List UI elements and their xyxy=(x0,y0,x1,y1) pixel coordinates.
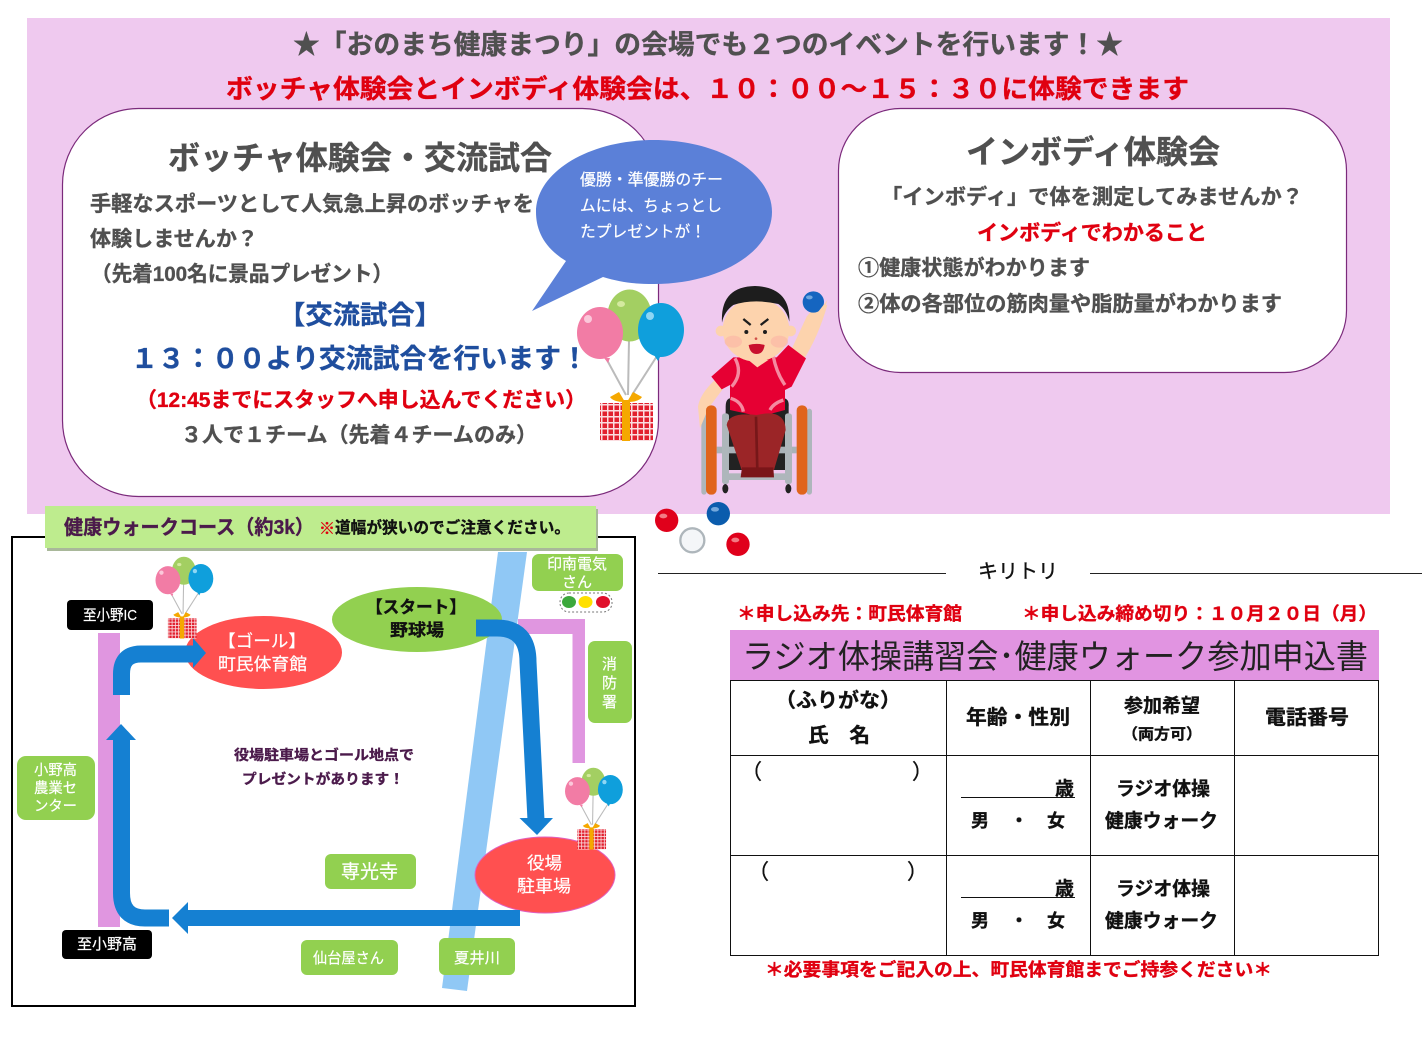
row 2: 男 xyxy=(971,911,989,931)
prize note: プレゼントがあります！ xyxy=(242,771,404,787)
match time: １３：００より交流試合を行います！ xyxy=(131,344,588,374)
label: Innami Electric xyxy=(532,554,623,591)
label: Ono High agriculture center: 小野高 xyxy=(34,762,77,779)
row 1: 健康ウォーク xyxy=(1105,810,1218,832)
application deadline: ＊申し込み締め切り：１０月２０日（月） xyxy=(1022,604,1377,624)
header: participation: 参加希望 xyxy=(1124,695,1200,717)
icon: balloons with gift xyxy=(577,290,684,441)
row 2: ・ xyxy=(1010,911,1028,931)
goal: town gymnasium: 町民体育館 xyxy=(218,655,307,674)
row 1: 歳 xyxy=(1055,778,1074,800)
icon: parking balloons xyxy=(565,768,623,850)
inbody benefits: ②体の各部位の筋肉量や脂肪量がわかります xyxy=(858,292,1282,316)
inbody subheading: インボディでわかること xyxy=(977,221,1207,245)
callout: prize speech bubble: ムには、ちょっとし xyxy=(580,198,722,215)
cut line: キリトリ xyxy=(978,561,1058,583)
row 1 xyxy=(741,761,1218,832)
town hall parking xyxy=(475,837,615,913)
label: Ono High agriculture center: 農業セ xyxy=(34,780,77,797)
heading: form title: ラジオ体操講習会･健康ウォーク参加申込書 xyxy=(742,638,1368,675)
callout: prize speech bubble: たプレゼントが！ xyxy=(580,223,706,241)
prize note xyxy=(234,747,414,787)
icon: goal balloons xyxy=(156,557,213,639)
header: participation xyxy=(1122,695,1202,743)
application destination: ＊申し込み先：町民体育館 xyxy=(737,604,962,624)
label: to Ono IC: 至小野IC xyxy=(83,607,137,624)
panel: pink event background xyxy=(27,18,1390,514)
boccia description xyxy=(90,193,534,286)
prize note: 役場駐車場とゴール地点で xyxy=(234,747,414,763)
label: fire station xyxy=(588,641,632,723)
row 1: 男 xyxy=(971,811,989,831)
town hall parking: 役場 xyxy=(527,854,562,873)
header: name: （ふりがな） xyxy=(775,688,901,712)
heading: walking course banner: 道幅が狭いのでご注意ください。 xyxy=(335,518,570,537)
arrow: west road north xyxy=(106,724,169,918)
row 2: （ xyxy=(748,861,769,884)
row 2: ラジオ体操 xyxy=(1116,878,1210,900)
row 1: ラジオ体操 xyxy=(1116,778,1210,800)
header: phone: 電話番号 xyxy=(1265,706,1349,729)
label: Sendaiya xyxy=(301,940,398,975)
town hall parking: 駐車場 xyxy=(517,877,571,896)
label: fire station: 署 xyxy=(602,694,617,711)
inbody invitation: 「インボディ」で体を測定してみませんか？ xyxy=(881,185,1303,209)
row 2: ） xyxy=(907,861,928,884)
callout: prize speech bubble xyxy=(532,140,772,311)
row 2: 健康ウォーク xyxy=(1105,910,1218,932)
label: fire station: 消 xyxy=(602,656,617,673)
row 1: ） xyxy=(912,761,933,784)
callout: prize speech bubble: 優勝・準優勝のチー xyxy=(580,171,723,189)
label: fire station: 防 xyxy=(602,675,617,692)
heading: experience times: ボッチャ体験会とインボディ体験会は、１０：００～１５：３０に体験できます xyxy=(226,74,1189,104)
row 1: ・ xyxy=(1010,811,1028,831)
arrow: parking to west corner xyxy=(172,902,520,934)
start: baseball field xyxy=(332,587,502,652)
inbody benefits: ①健康状態がわかります xyxy=(858,256,1090,280)
east road xyxy=(518,619,585,763)
label: Innami Electric: さん xyxy=(562,574,592,591)
west road xyxy=(98,633,120,927)
label: Innami Electric: 印南電気 xyxy=(547,556,607,573)
boccia title: ボッチャ体験会・交流試合 xyxy=(168,140,552,176)
label: to Ono IC xyxy=(67,600,153,630)
boccia description: （先着100名に景品プレゼント） xyxy=(91,262,393,286)
label: Sendaiya: 仙台屋さん xyxy=(313,950,384,967)
goal: town gymnasium: 【ゴール】 xyxy=(218,631,306,651)
heading: walking course banner: ※ xyxy=(319,521,335,538)
heading: walking course banner: 健康ウォークコース（約3k） xyxy=(64,516,314,539)
arrow: to goal xyxy=(122,638,206,695)
label: Senkoji temple: 専光寺 xyxy=(341,861,398,883)
label: Ono High agriculture center xyxy=(17,756,95,820)
match heading: 【交流試合】 xyxy=(278,300,442,330)
start: baseball field: 野球場 xyxy=(390,621,444,640)
label: Senkoji temple xyxy=(325,854,416,889)
heading: festival events: ★「おのまち健康まつり」の会場でも２つのイベントを行います！★ xyxy=(293,30,1123,60)
goal: town gymnasium xyxy=(185,616,342,689)
header: participation: （両方可） xyxy=(1122,725,1202,743)
label: Ono High agriculture center: ンター xyxy=(34,798,77,815)
table: application form xyxy=(730,680,1379,956)
match deadline: （12:45までにスタッフへ申し込んでください） xyxy=(136,389,586,412)
row 2 xyxy=(748,861,1218,932)
row 2: 歳 xyxy=(1055,878,1074,900)
header: age and gender: 年齢・性別 xyxy=(966,706,1070,729)
row 2: 女 xyxy=(1047,911,1065,931)
label: Natsui river: 夏井川 xyxy=(454,950,500,967)
inbody title: インボディ体験会 xyxy=(966,134,1220,170)
heading: walking course banner xyxy=(45,506,598,551)
team rule: ３人で１チーム（先着４チームのみ） xyxy=(181,424,537,447)
panel: boccia xyxy=(62,108,658,496)
boccia description: 体験しませんか？ xyxy=(90,228,258,251)
row 1: （ xyxy=(741,761,762,784)
inbody benefits xyxy=(858,256,1282,316)
traffic light xyxy=(560,593,612,612)
label: Natsui river xyxy=(439,938,515,975)
start: baseball field: 【スタート】 xyxy=(366,598,466,617)
label: to Ono High: 至小野高 xyxy=(77,936,137,953)
icon: athlete in wheelchair xyxy=(655,286,827,556)
header: name: 氏 名 xyxy=(808,724,870,747)
label: to Ono High xyxy=(62,930,152,959)
row 1: 女 xyxy=(1047,811,1065,831)
river xyxy=(442,552,527,991)
form footnote: ＊必要事項をご記入の上、町民体育館までご持参ください＊ xyxy=(765,959,1272,980)
arrow: start to parking xyxy=(476,628,553,835)
header: name xyxy=(775,688,901,747)
boccia description: 手軽なスポーツとして人気急上昇のボッチャを xyxy=(90,193,534,216)
panel: inbody xyxy=(838,108,1346,372)
panel: walking course map xyxy=(12,537,635,1006)
